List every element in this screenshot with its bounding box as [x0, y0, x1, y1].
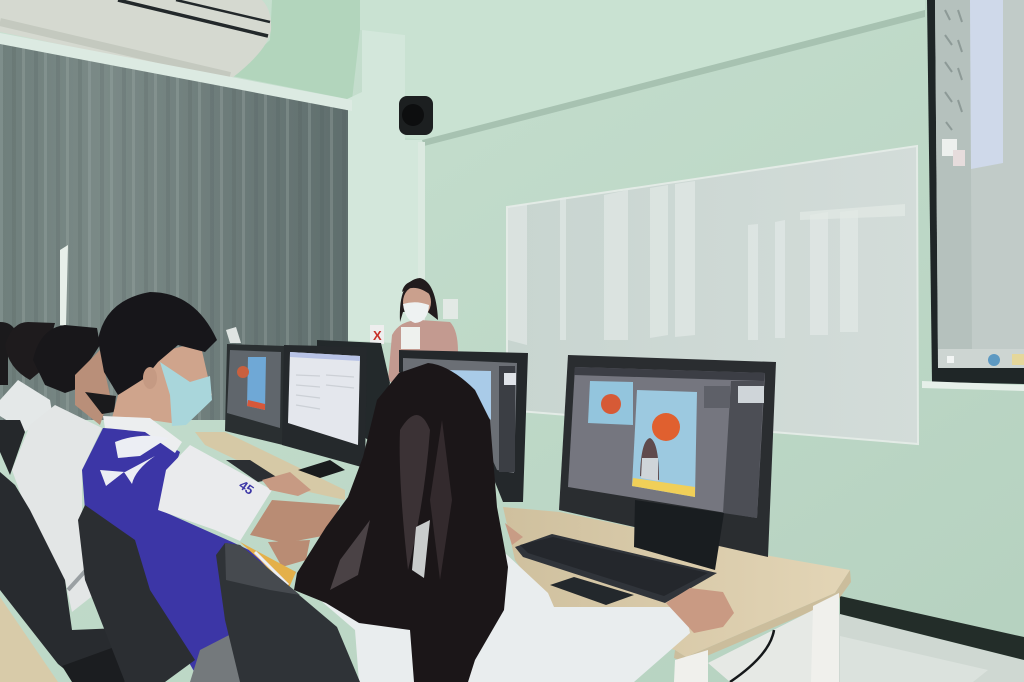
left students: [0, 322, 116, 612]
teacher: [388, 278, 458, 385]
red x sign: [370, 325, 384, 344]
small paper on monitor: [226, 327, 241, 343]
monitor 3: [399, 350, 528, 502]
phone: [550, 577, 634, 605]
wall rail: [422, 10, 925, 146]
wall switch: [443, 299, 458, 319]
left foreground desk: [0, 597, 58, 682]
monitor 2: [282, 345, 367, 468]
student in blue jersey: 45: [236, 477, 257, 498]
whiteboard: [507, 146, 918, 444]
main keyboard: [515, 534, 717, 603]
back monitor: [317, 340, 390, 440]
chair behind: [0, 420, 25, 475]
back desk: [195, 432, 345, 500]
chair front: [216, 543, 360, 682]
projection screen: [922, 0, 1024, 391]
wall speaker: [399, 96, 433, 135]
floor skirting and tiles: [800, 596, 1024, 682]
black bag on monitor: [634, 500, 724, 570]
chair left: [0, 472, 125, 682]
main monitor: [559, 355, 776, 557]
student in white with long hair: [294, 363, 734, 682]
student in blue jersey: [82, 292, 340, 682]
window curtain: [0, 33, 352, 420]
monitor 1: [225, 344, 285, 445]
red x sign: X: [373, 328, 382, 343]
air conditioner: [0, 0, 271, 78]
chair middle: [78, 505, 245, 682]
main desk: [503, 507, 851, 682]
